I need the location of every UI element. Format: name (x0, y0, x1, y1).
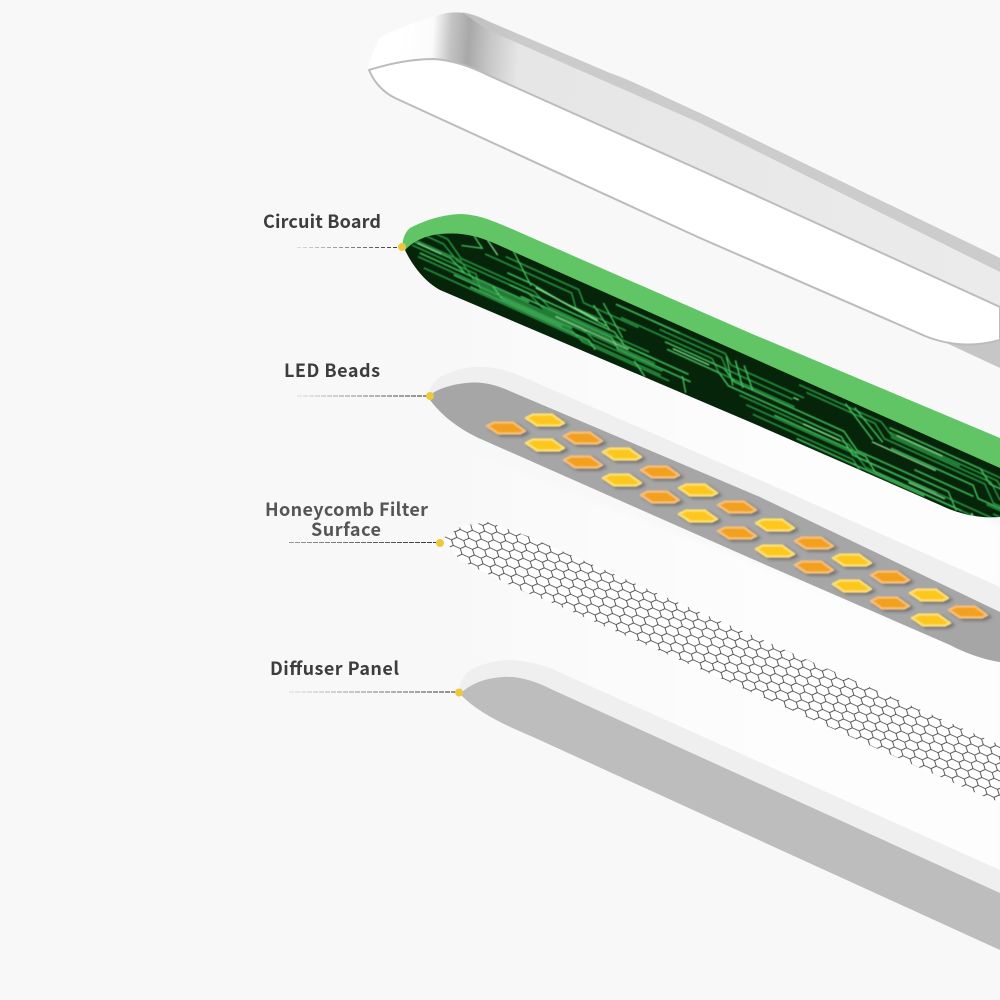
label: Diffuser Panel: Diffuser Panel (270, 655, 399, 681)
diffuser panel layer (458, 660, 1000, 950)
lamp housing (367, 12, 1000, 368)
white light panel (369, 59, 1000, 345)
label: Honeycomb Filter Surface: Surface (311, 516, 381, 542)
yellow LED chips (526, 414, 950, 626)
honeycomb filter mesh (443, 522, 1000, 802)
circuit traces (412, 234, 1000, 518)
label: Honeycomb Filter Surface: Honeycomb Filter (265, 496, 428, 522)
diffuser light rim (458, 660, 1000, 900)
LED board light rim (427, 367, 1000, 620)
circuit board layer (402, 214, 1000, 518)
green board rim (402, 214, 1000, 470)
label: Honeycomb Filter Surface (265, 496, 444, 547)
housing silver shell (367, 12, 1000, 345)
diffuser grey surface (460, 677, 1000, 950)
LED board grey surface (428, 382, 1000, 662)
housing inner grey end (940, 338, 1000, 368)
label: LED Beads (284, 357, 434, 400)
soft white background bands (440, 280, 1000, 880)
orange LED chips (487, 422, 987, 618)
dark board surface (405, 233, 1000, 517)
LED beads layer (427, 367, 1000, 662)
label: Circuit Board (263, 208, 406, 251)
label: LED Beads: LED Beads (284, 357, 380, 383)
LED chip shadows (490, 416, 990, 628)
label: Diffuser Panel (270, 655, 463, 696)
label: Circuit Board: Circuit Board (263, 208, 381, 234)
housing top edge shade (462, 12, 1000, 272)
